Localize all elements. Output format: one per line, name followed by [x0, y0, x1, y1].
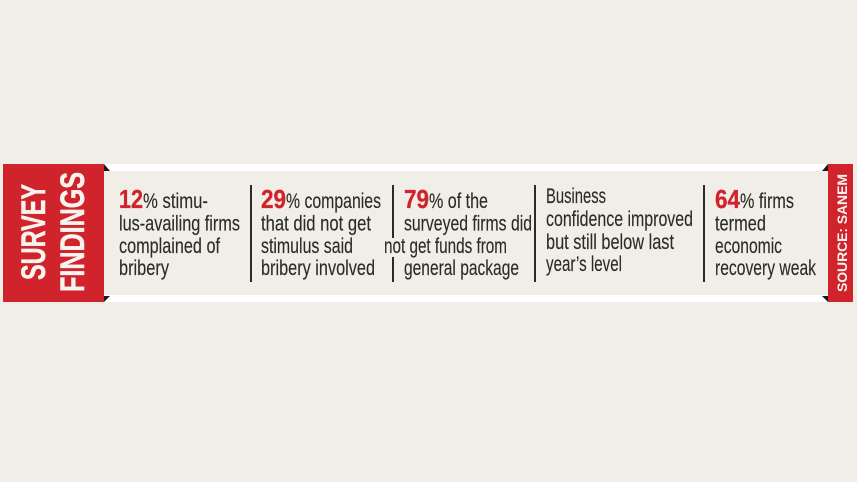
- finding 3: 79%: [384, 184, 532, 280]
- finding 2: 29%: 29: [261, 184, 286, 214]
- finding 5: 64%: economic: [715, 234, 782, 258]
- finding 2: 29%: % companies: [286, 189, 381, 213]
- divider 1: [250, 185, 252, 282]
- finding 4: business confidence: confidence improved: [546, 207, 693, 231]
- panel: survey findings label: SURVEY: [15, 184, 53, 280]
- finding 4: business confidence: Business: [546, 184, 606, 208]
- finding 5: 64%: recovery weak: [715, 256, 816, 280]
- finding 4: business confidence: but still below last: [546, 230, 674, 254]
- divider 3: [534, 185, 536, 282]
- panel: survey findings label: [3, 164, 104, 302]
- finding 3: 79%: not get funds from: [384, 234, 507, 258]
- finding 4: business confidence: year’s level: [546, 252, 622, 276]
- finding 5: 64%: termed: [715, 212, 766, 236]
- panel: source label: [828, 164, 853, 302]
- panel: survey findings label: FINDINGS: [54, 172, 92, 292]
- finding 1: 12%: 12: [119, 184, 143, 214]
- icon: left fold corners: [104, 164, 110, 302]
- finding 1: 12%: [119, 184, 240, 280]
- finding 3: 79%: general package: [404, 256, 519, 280]
- finding 5: 64%: 64: [715, 184, 740, 214]
- finding 1: 12%: % stimu-: [143, 189, 208, 213]
- finding 1: 12%: bribery: [119, 256, 169, 280]
- divider 4: [703, 185, 705, 282]
- divider 2: [392, 185, 394, 282]
- finding 5: 64%: [715, 184, 816, 280]
- finding 3: 79%: % of the: [429, 189, 488, 213]
- banner strip: [104, 164, 828, 302]
- finding 2: 29%: [261, 184, 381, 280]
- finding 2: 29%: stimulus said: [261, 234, 353, 258]
- finding 4: business confidence: [546, 184, 693, 276]
- panel: source label: SOURCE: SANEM: [834, 174, 850, 292]
- finding 3: 79%: 79: [404, 184, 429, 214]
- finding 2: 29%: bribery involved: [261, 256, 375, 280]
- finding 2: 29%: that did not get: [261, 212, 371, 236]
- icon: right fold corners: [822, 164, 828, 302]
- finding 1: 12%: lus-availing firms: [119, 212, 240, 236]
- finding 5: 64%: % firms: [740, 189, 794, 213]
- finding 3: 79%: surveyed firms did: [404, 212, 532, 236]
- finding 1: 12%: complained of: [119, 234, 220, 258]
